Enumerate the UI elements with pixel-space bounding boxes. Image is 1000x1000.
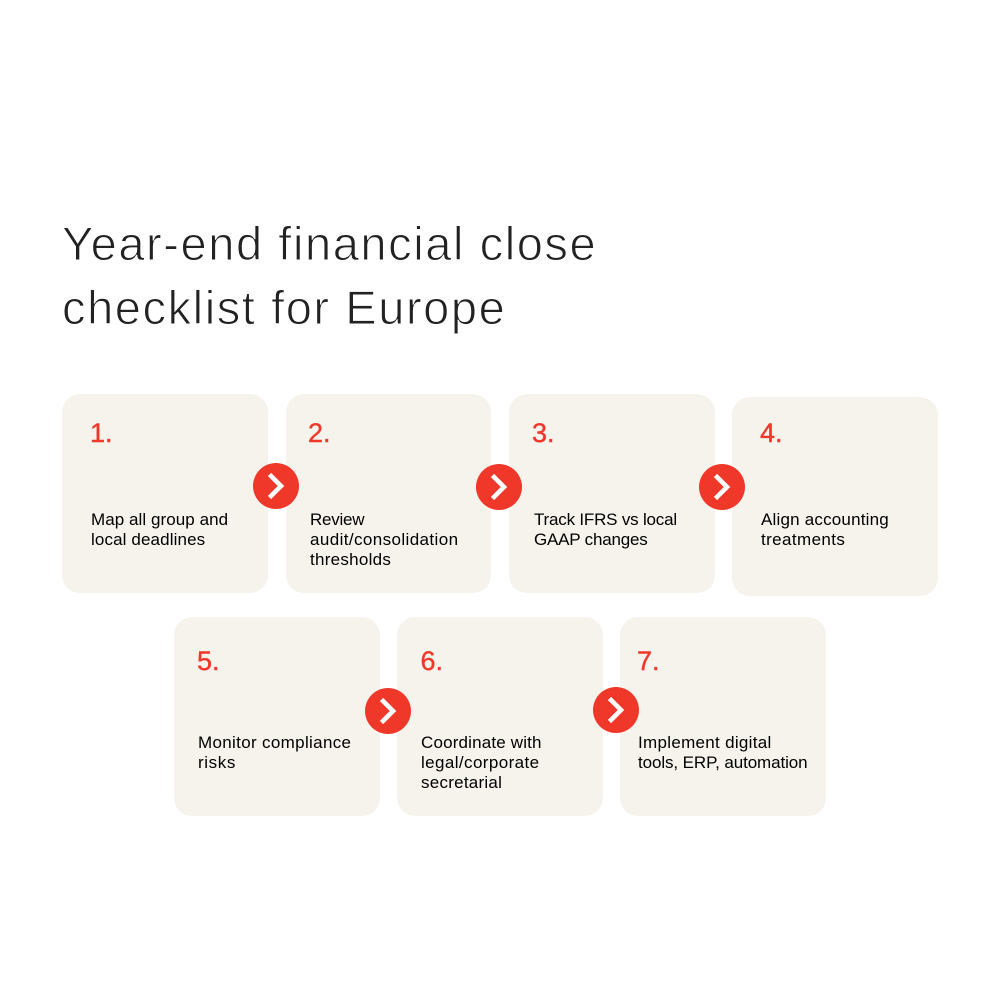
arrow 5 to 6 [365,688,411,734]
text 6: Coordinate with [421,733,542,752]
arrow 6 to 7 [593,687,639,733]
card 2 [286,394,491,593]
number 4: 4. [760,418,783,448]
text 3 [534,510,677,549]
text 7: Implement digital [638,733,772,752]
number 6: 6. [420,646,443,676]
text 6 [421,733,542,792]
title: checklist for Europe [62,281,506,334]
number 5: 5. [197,646,220,676]
text 6: secretarial [421,773,502,792]
card 6 [397,617,603,816]
arrow 2 to 3 [476,464,522,510]
text 7 [638,733,807,772]
number 7: 7. [637,646,660,676]
text 7: tools, ERP, automation [638,753,807,772]
text 1: Map all group and [91,510,228,529]
card 7 [620,617,826,816]
text 2 [310,510,458,569]
card 4 [732,397,938,596]
title: Year-end financial close [62,217,597,270]
number 1: 1. [90,418,113,448]
text 1: local deadlines [91,530,205,549]
text 5 [198,733,351,772]
card 3 [509,394,715,593]
text 3: Track IFRS vs local [534,510,677,529]
text 1 [91,510,228,549]
number 3: 3. [532,418,555,448]
card 5 [174,617,380,816]
text 3: GAAP changes [534,530,648,549]
text 2: thresholds [310,550,391,569]
text 2: Review [310,510,364,529]
number 2: 2. [308,418,331,448]
text 6: legal/corporate [421,753,539,772]
arrow 1 to 2 [253,463,299,509]
title [62,217,597,334]
text 5: Monitor compliance [198,733,351,752]
text 5: risks [198,753,236,772]
text 4: treatments [761,530,845,549]
text 4: Align accounting [761,510,889,529]
text 4 [761,510,889,549]
text 2: audit/consolidation [310,530,458,549]
arrow 3 to 4 [699,464,745,510]
card 1 [62,394,268,593]
